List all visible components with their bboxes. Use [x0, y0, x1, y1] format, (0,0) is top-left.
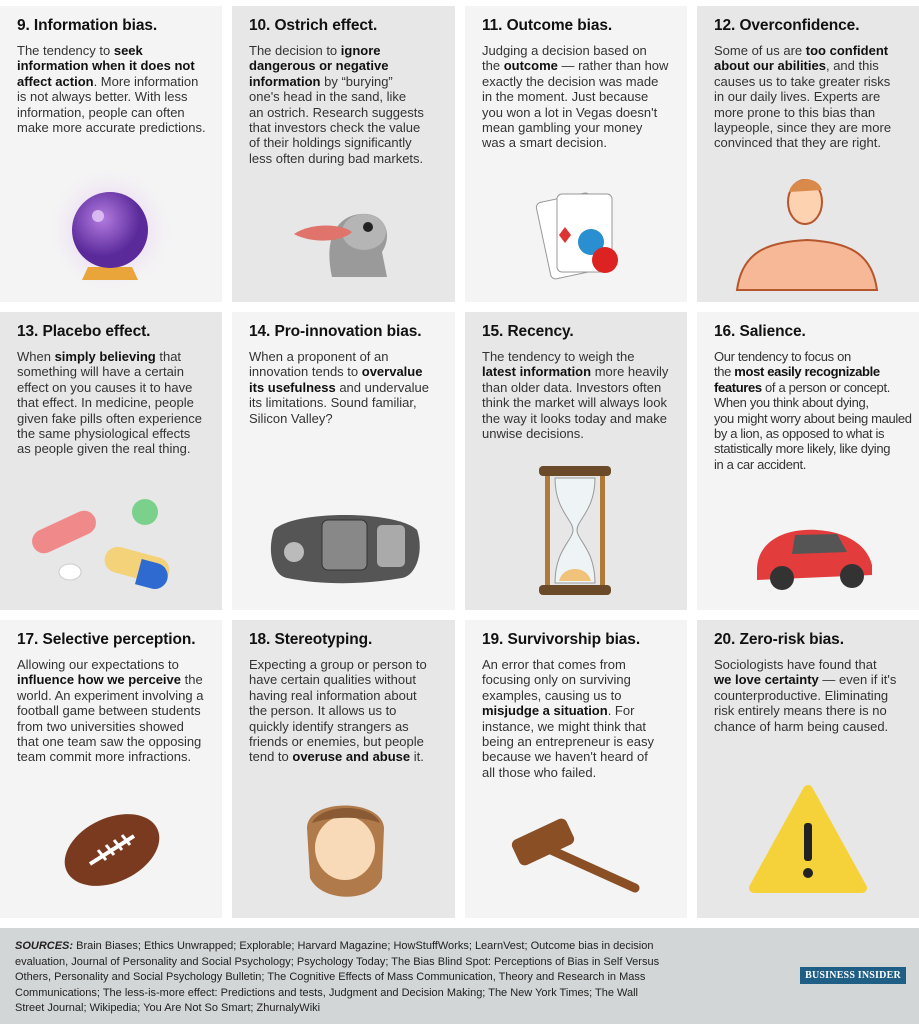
text block: affect action. More information — [17, 74, 198, 89]
text block: information, people can often — [17, 105, 185, 120]
text block — [482, 657, 654, 780]
panel: placebo effect — [0, 312, 222, 610]
text block — [714, 43, 891, 150]
text block: influence how we perceive the — [17, 672, 203, 687]
text block — [17, 43, 206, 135]
text block — [17, 349, 202, 456]
text block: an ostrich. Research suggests — [249, 105, 424, 120]
text block: latest information more heavily — [482, 364, 668, 379]
text block: counterproductive. Eliminating — [714, 688, 888, 703]
text block — [249, 43, 424, 166]
text block: Some of us are too confident — [714, 43, 888, 58]
text block: unwise decisions. — [482, 426, 584, 441]
text block: think the market will always look — [482, 395, 667, 410]
text block: as people given the real thing. — [17, 441, 190, 456]
icon: pills — [32, 499, 170, 589]
text block: Silicon Valley? — [249, 411, 333, 426]
text block: sources: SOURCES: Brain Biases; Ethics Unwrapped; Explorable; Harvard Magazine; HowStuffWorks; LearnVest; Outcome bias in decision — [15, 940, 654, 952]
text block: dangerous or negative — [249, 58, 388, 73]
text block — [249, 349, 429, 426]
icon: warning sign — [749, 785, 867, 893]
footer: sources — [0, 928, 919, 1024]
text block: the same physiological effects — [17, 426, 190, 441]
text block: that one team saw the opposing — [17, 734, 201, 749]
text block: make more accurate predictions. — [17, 120, 206, 135]
text block: in the moment. Just because — [482, 89, 648, 104]
text block: more prone to this bias than — [714, 105, 875, 120]
text block: tend to overuse and abuse it. — [249, 749, 424, 764]
text block: information when it does not — [17, 58, 195, 73]
text block: the outcome — rather than how — [482, 58, 668, 73]
icon: confident man — [736, 179, 878, 291]
text block: its usefulness and undervalue — [249, 380, 429, 395]
text block: statistically more likely, like dying — [714, 441, 890, 456]
text block: chance of harm being caused. — [714, 719, 888, 734]
text block: by a lion, as opposed to what is — [714, 426, 884, 441]
text block: you won a lot in Vegas doesn't — [482, 105, 657, 120]
text block: The decision to ignore — [249, 43, 381, 58]
icon: gavel — [512, 818, 640, 892]
panel: ostrich effect — [232, 6, 455, 302]
icon: cards and chips — [536, 192, 618, 280]
heading: 11. Outcome bias. — [482, 17, 612, 34]
text block: of their holdings significantly — [249, 135, 412, 150]
text block: Sociologists have found that — [714, 657, 877, 672]
text block: focusing only on surviving — [482, 672, 631, 687]
text block: sources: Others, Personality and Social Psychology Bulletin; The Cognitive Effects of Mass Communication, Theory and Research in Mass — [15, 971, 645, 983]
heading: 14. Pro-innovation bias. — [249, 323, 421, 340]
text block: innovation tends to overvalue — [249, 364, 422, 379]
icon: ostrich — [294, 214, 387, 277]
text block: was a smart decision. — [482, 135, 607, 150]
panel: recency — [465, 312, 687, 610]
text block: from two universities showed — [17, 719, 184, 734]
text block: the person. It allows us to — [249, 703, 396, 718]
text block: When simply believing that — [17, 349, 181, 364]
text block — [17, 657, 204, 764]
text block: its limitations. Sound familiar, — [249, 395, 417, 410]
icon: football — [64, 814, 160, 886]
heading: 17. Selective perception. — [17, 631, 195, 648]
text block: one's head in the sand, like — [249, 89, 406, 104]
text block: examples, causing us to — [482, 688, 621, 703]
heading: 13. Placebo effect. — [17, 323, 150, 340]
text block: quickly identify strangers as — [249, 719, 409, 734]
panel: salience — [697, 312, 919, 610]
icon: hipster face — [307, 806, 384, 897]
text block: misjudge a situation. For — [482, 703, 634, 718]
text block: The tendency to weigh the — [482, 349, 634, 364]
text block: the most easily recognizable — [714, 364, 880, 379]
text block — [249, 657, 427, 764]
text block: information by “burying” — [249, 74, 393, 89]
text block: Allowing our expectations to — [17, 657, 179, 672]
text block: that investors check the value — [249, 120, 420, 135]
text block: have certain qualities without — [249, 672, 416, 687]
heading: 16. Salience. — [714, 323, 806, 340]
text block: we love certainty — even if it's — [714, 672, 896, 687]
heading: 15. Recency. — [482, 323, 574, 340]
text block: mean gambling your money — [482, 120, 642, 135]
text block: sources: evaluation, Journal of Personality and Social Psychology; Psychology Today; The Bias Blind Spot: Perceptions of Bias in Self Versus — [15, 956, 659, 968]
panel: zero-risk bias — [697, 620, 919, 918]
text block — [714, 349, 912, 472]
text block: exactly the decision was made — [482, 74, 658, 89]
panel: survivorship bias — [465, 620, 687, 918]
text block: because we haven't heard of — [482, 749, 648, 764]
text block: less often during bad markets. — [249, 151, 423, 166]
heading: 19. Survivorship bias. — [482, 631, 640, 648]
text block: sources — [15, 940, 659, 1014]
logo: business insider: BUSINESS INSIDER — [805, 970, 901, 981]
icon: crashed car — [757, 530, 872, 590]
heading: 10. Ostrich effect. — [249, 17, 377, 34]
text block: convinced that they are right. — [714, 135, 881, 150]
icon: hourglass — [539, 466, 611, 595]
panel: outcome bias — [465, 6, 687, 302]
heading: 9. Information bias. — [17, 17, 157, 34]
panel: information bias — [0, 6, 222, 302]
text block: Judging a decision based on — [482, 43, 647, 58]
text block: instance, we might think that — [482, 719, 646, 734]
text block: features of a person or concept. — [714, 380, 890, 395]
text block: Expecting a group or person to — [249, 657, 427, 672]
text block: football game between students — [17, 703, 201, 718]
text block: causes us to take greater risks — [714, 74, 890, 89]
panel: stereotyping — [232, 620, 455, 918]
text block: sources: Communications; The less-is-more effect: Predictions and tests, Judgment and Decision Making; The New York Times; The Wall — [15, 986, 638, 998]
text block: in our daily lives. Experts are — [714, 89, 880, 104]
text block — [714, 657, 896, 734]
text block: something will have a certain — [17, 364, 184, 379]
text block: effect on you causes it to have — [17, 380, 192, 395]
text block: having real information about — [249, 688, 417, 703]
text block: laypeople, since they are more — [714, 120, 891, 135]
text block: is not always better. With less — [17, 89, 188, 104]
text block: When you think about dying, — [714, 395, 869, 410]
text block: friends or enemies, but people — [249, 734, 424, 749]
logo: business insider — [800, 967, 906, 984]
panel: overconfidence — [697, 6, 919, 302]
text block: about our abilities, and this — [714, 58, 879, 73]
heading: 12. Overconfidence. — [714, 17, 859, 34]
text block: being an entrepreneur is easy — [482, 734, 654, 749]
text block: that effect. In medicine, people — [17, 395, 194, 410]
text block: Our tendency to focus on — [714, 349, 851, 364]
text block: world. An experiment involving a — [17, 688, 203, 703]
text block: When a proponent of an — [249, 349, 388, 364]
text block: sources: Street Journal; Wikipedia; You Are Not So Smart; ZhurnalyWiki — [15, 1002, 320, 1014]
text block: The tendency to seek — [17, 43, 143, 58]
text block: An error that comes from — [482, 657, 626, 672]
text block — [482, 349, 668, 441]
text block: in a car accident. — [714, 457, 806, 472]
text block — [482, 43, 668, 150]
text block: team commit more infractions. — [17, 749, 191, 764]
heading: 18. Stereotyping. — [249, 631, 372, 648]
panel: selective perception — [0, 620, 222, 918]
panel: pro-innovation bias — [232, 312, 455, 610]
icon: crystal ball — [66, 185, 154, 280]
text block: than older data. Investors often — [482, 380, 661, 395]
text block: the way it looks today and make — [482, 411, 667, 426]
text block: given fake pills often experience — [17, 411, 202, 426]
icon: phone — [270, 515, 420, 584]
text block: risk entirely means there is no — [714, 703, 887, 718]
text block: all those who failed. — [482, 765, 596, 780]
heading: 20. Zero-risk bias. — [714, 631, 844, 648]
text block: you might worry about being mauled — [714, 411, 912, 426]
